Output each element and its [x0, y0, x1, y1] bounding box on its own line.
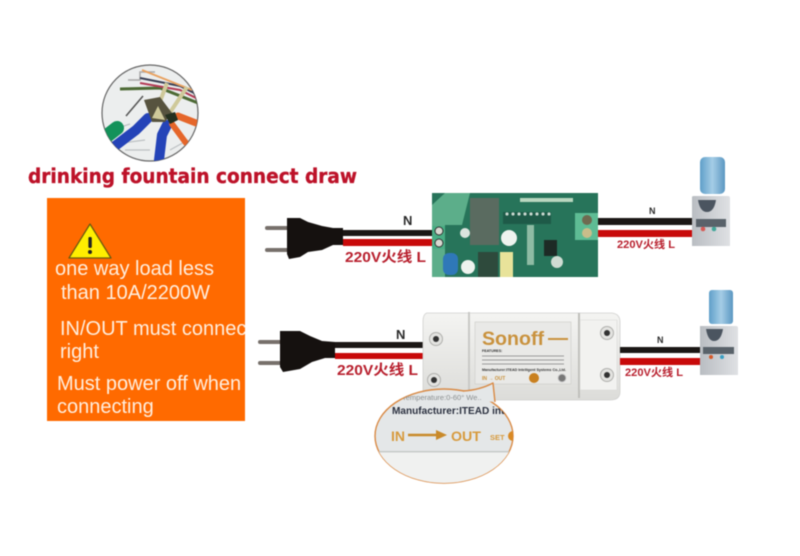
callout: IN OUT magnifier: SET [490, 433, 505, 442]
icon: mains plug top [265, 218, 343, 259]
label: 220V top right: 220V火线 L [617, 237, 675, 251]
label: N top right: N [649, 206, 656, 216]
device label [475, 322, 571, 384]
diagram: sonoff wiring [258, 290, 738, 400]
warning text: connecting [57, 396, 154, 418]
wires: output bottom [620, 347, 701, 365]
icon: mains plug bottom [258, 331, 335, 372]
icon: water cooler bottom [700, 290, 738, 375]
warning text: than 10A/2200W [61, 282, 210, 304]
warning text: right [60, 341, 99, 363]
device label: FEATURES: [482, 349, 502, 353]
callout: IN OUT magnifier: OUT [451, 428, 481, 444]
sonoff device [423, 312, 620, 400]
label: 220V top left: 220V火线 L [345, 248, 426, 266]
label: N bottom left: N [396, 327, 405, 342]
label: N top left: N [403, 213, 412, 228]
wires: input bottom [335, 342, 424, 359]
warning text [55, 258, 252, 418]
device label: Manufacturer:ITEAD Intelligent Systems Co.,Ltd. [482, 367, 566, 372]
wires: input top [343, 230, 433, 246]
label: 220V bottom left: 220V火线 L [337, 361, 418, 379]
icon: water cooler top [692, 157, 730, 246]
callout: IN OUT magnifier: IN [391, 428, 405, 444]
callout: IN OUT magnifier [375, 383, 518, 484]
warning text: one way load less [55, 258, 214, 280]
device label: Sonoff [482, 329, 545, 350]
callout: IN OUT magnifier: Temperature:0-60° We.. [402, 393, 482, 402]
diagram: wifi board wiring [265, 157, 730, 277]
wires: output top [598, 218, 693, 237]
callout: IN OUT magnifier: Manufacturer:ITEAD inte [392, 406, 510, 417]
panel: warnings [47, 198, 252, 421]
icon: circular tools photo [102, 65, 198, 161]
device label: IN → OUT [482, 376, 505, 382]
warning text: Must power off when [57, 373, 241, 395]
circuit board [432, 193, 598, 277]
label: 220V bottom right: 220V火线 L [625, 365, 683, 379]
warning text: IN/OUT must connect [60, 318, 252, 340]
title: drinking fountain connect draw [28, 164, 357, 188]
label: N bottom right: N [657, 335, 664, 345]
icon: warning triangle [69, 224, 111, 258]
